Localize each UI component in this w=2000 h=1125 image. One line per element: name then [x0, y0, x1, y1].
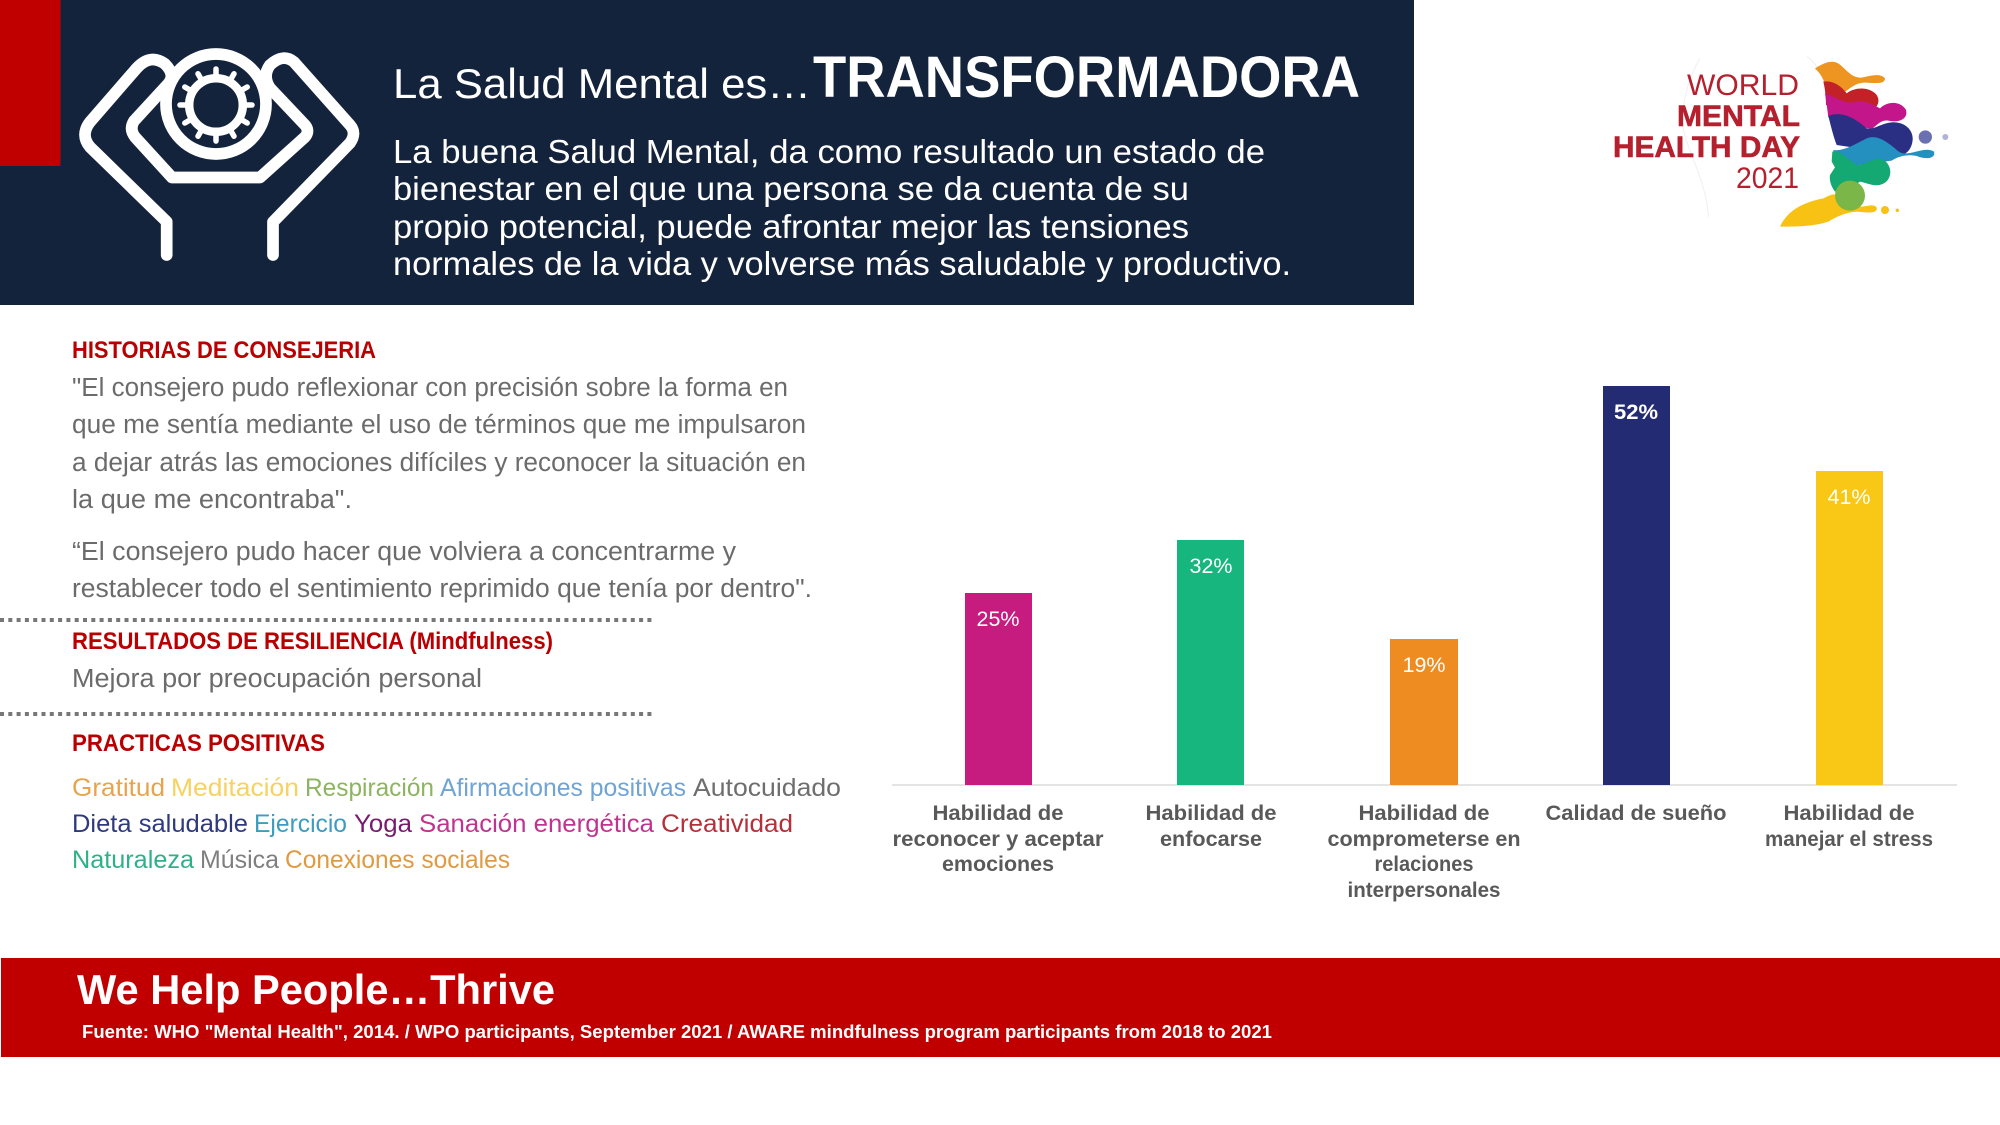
bar: 25%: 25%	[976, 608, 1020, 631]
practices word list	[72, 774, 841, 874]
intro paragraph: bienestar en el que una persona se da cuenta de su	[393, 170, 1189, 207]
bar: 32%	[1177, 540, 1244, 785]
source line: Fuente: WHO "Mental Health", 2014. / WPO participants, September 2021 / AWARE mindfulness program participants from 2018 to 2021	[82, 1021, 1272, 1042]
practices word list: Autocuidado	[693, 774, 841, 802]
logo wordmark: WORLD	[1687, 69, 1799, 102]
bar: 19%	[1390, 639, 1458, 785]
panel: positive practices	[72, 730, 841, 874]
panel: counseling stories	[72, 337, 812, 603]
axis labels: Habilidad de	[1358, 802, 1490, 825]
axis labels: reconocer y aceptar	[892, 828, 1104, 851]
quote 1: "El consejero pudo reflexionar con precisión sobre la forma en	[72, 374, 788, 402]
bar: 52%: 52%	[1614, 401, 1658, 424]
title: La Salud Mental es…	[393, 60, 811, 107]
intro paragraph	[393, 133, 1291, 282]
quote 1: la que me encontraba".	[72, 486, 352, 514]
axis labels: manejar el stress	[1765, 828, 1933, 851]
footer slogan: We Help People…Thrive	[77, 966, 555, 1013]
practices word list: Ejercicio	[254, 810, 347, 838]
icon: hands holding gear	[85, 54, 354, 255]
logo: World Mental Health Day 2021	[1613, 57, 1948, 227]
intro paragraph: normales de la vida y volverse más saludable y productivo.	[393, 245, 1291, 282]
bar: 32%: 32%	[1190, 555, 1232, 578]
bar chart	[892, 386, 1957, 902]
title: TRANSFORMADORA	[813, 45, 1360, 110]
practices word list: Creatividad	[661, 810, 793, 838]
practices word list: Gratitud	[72, 774, 165, 802]
practices word list: Meditación	[171, 774, 299, 802]
logo faint head outline	[1682, 57, 1823, 217]
practices word list: Dieta saludable	[72, 810, 248, 838]
bar: 25%	[965, 593, 1032, 785]
heading: historias de consejeria: HISTORIAS DE CONSEJERIA	[72, 337, 376, 364]
axis labels: Calidad de sueño	[1546, 802, 1726, 825]
header banner	[0, 0, 1414, 305]
bar: 41%: 41%	[1828, 486, 1870, 509]
logo wordmark	[1613, 69, 1800, 195]
practices word list: Música	[200, 846, 279, 874]
heading: practicas positivas: PRACTICAS POSITIVAS	[72, 730, 325, 757]
practices word list: Naturaleza	[72, 846, 194, 874]
bar: 52%	[1603, 386, 1670, 785]
axis labels: enfocarse	[1160, 828, 1262, 851]
axis labels	[892, 802, 1933, 902]
axis labels: relaciones	[1374, 853, 1474, 876]
logo wordmark: HEALTH DAY	[1613, 131, 1800, 164]
title	[393, 45, 1360, 110]
bar: 19%: 19%	[1402, 654, 1446, 677]
axis labels: interpersonales	[1348, 879, 1500, 902]
logo wordmark: 2021	[1736, 162, 1799, 195]
practices word list: Respiración	[305, 774, 434, 802]
bar: 41%	[1816, 471, 1883, 785]
panel: resilience results	[72, 628, 553, 693]
quote 2: restablecer todo el sentimiento reprimido que tenía por dentro".	[72, 575, 812, 603]
intro paragraph: propio potencial, puede afrontar mejor las tensiones	[393, 208, 1189, 245]
quote 2	[72, 538, 812, 603]
quote 1	[72, 374, 806, 514]
practices word list: Afirmaciones positivas	[440, 774, 686, 802]
heading: resultados de resiliencia: RESULTADOS DE RESILIENCIA (Mindfulness)	[72, 628, 553, 655]
logo wordmark: MENTAL	[1677, 100, 1800, 133]
quote 1: que me sentía mediante el uso de términos que me impulsaron	[72, 411, 806, 439]
axis labels: Habilidad de	[1784, 802, 1914, 825]
axis labels: Habilidad de	[932, 802, 1064, 825]
axis labels: emociones	[942, 853, 1054, 876]
axis labels: comprometerse en	[1328, 828, 1520, 851]
intro paragraph: La buena Salud Mental, da como resultado un estado de	[393, 133, 1265, 170]
quote 1: a dejar atrás las emociones difíciles y reconocer la situación en	[72, 449, 806, 477]
quote 2: “El consejero pudo hacer que volviera a concentrarme y	[72, 538, 736, 566]
practices word list: Yoga	[354, 810, 412, 838]
axis labels: Habilidad de	[1146, 802, 1276, 825]
footer banner	[1, 958, 2000, 1057]
resilience result text: Mejora por preocupación personal	[72, 665, 482, 693]
practices word list: Sanación energética	[419, 810, 654, 838]
logo colourful head	[1780, 62, 1948, 227]
practices word list: Conexiones sociales	[285, 846, 510, 874]
